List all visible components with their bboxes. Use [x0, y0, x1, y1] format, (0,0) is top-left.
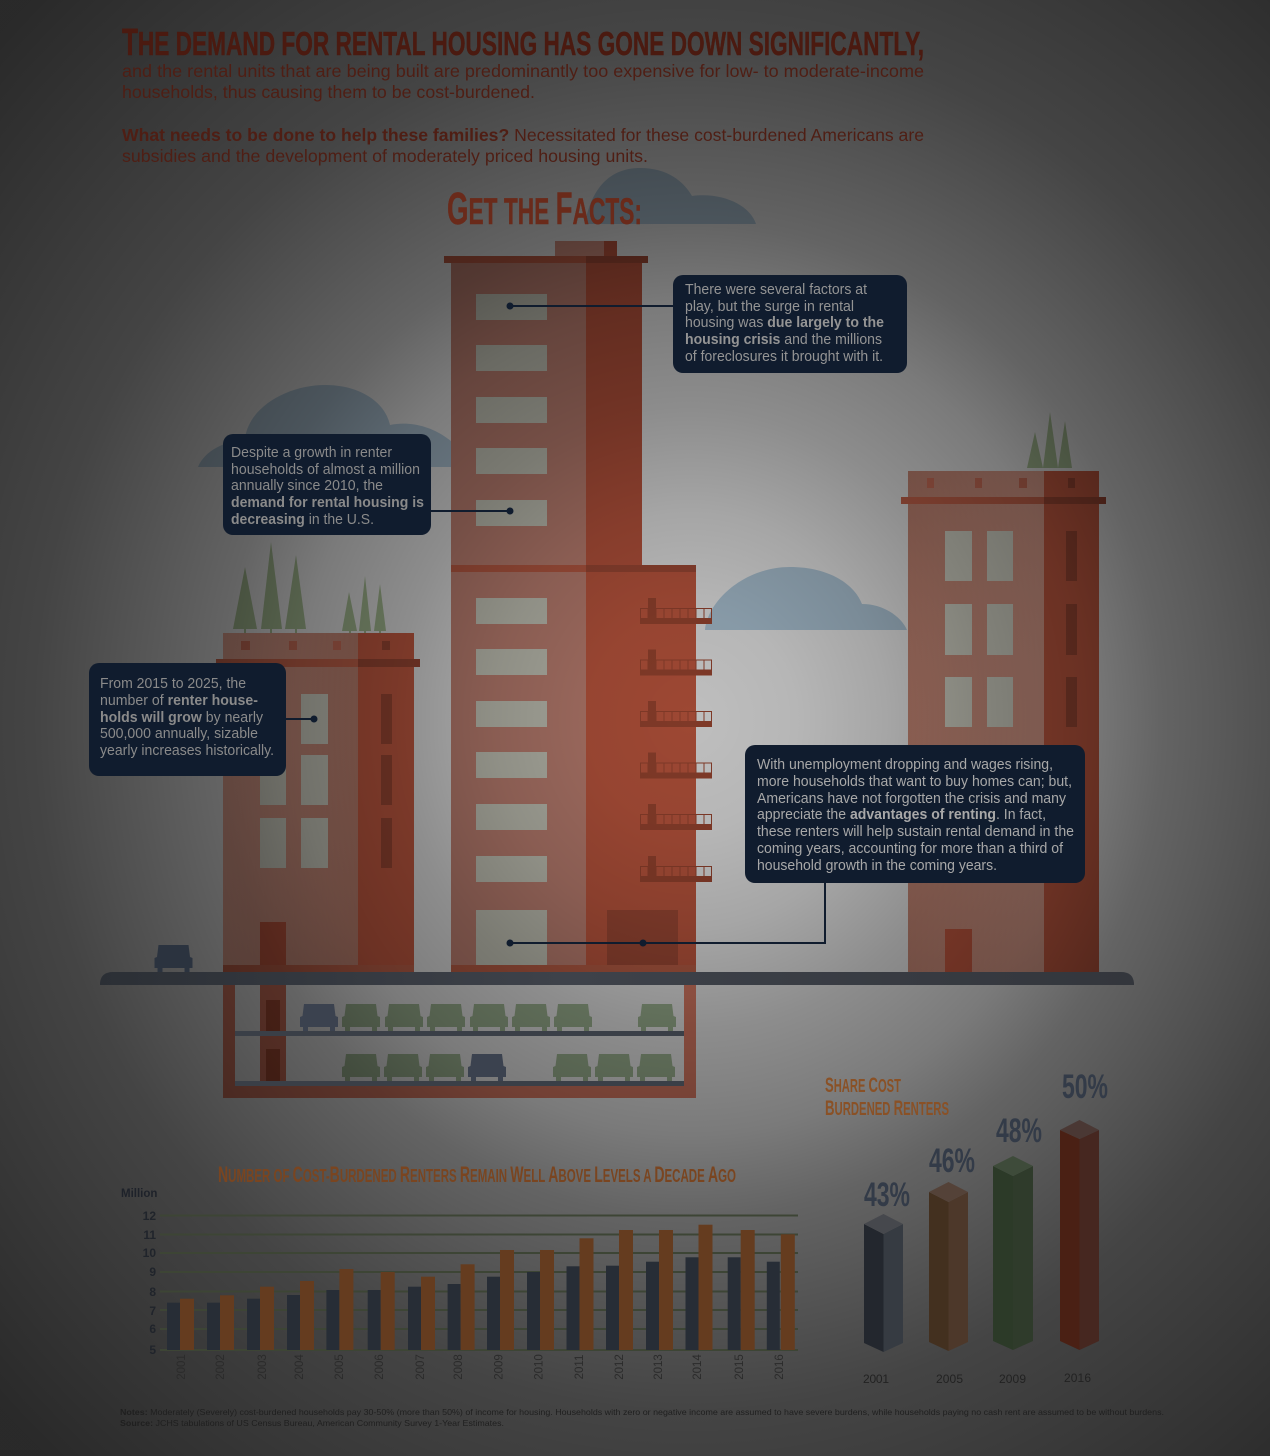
x axis labels: 2013 [653, 1354, 665, 1380]
percent labels [864, 1068, 1108, 1214]
x axis labels: 2016 [774, 1354, 786, 1380]
y axis labels: 8 [149, 1285, 156, 1299]
year labels: 2016 [1064, 1371, 1091, 1385]
y axis labels: 11 [143, 1228, 156, 1242]
x axis labels: 2010 [534, 1354, 546, 1380]
3d bar 2001 [864, 1214, 903, 1352]
callout: housing crisis: housing was due largely to the [685, 315, 884, 331]
callout: renter households grow: number of renter house- [100, 693, 258, 709]
y axis labels: 5 [149, 1343, 156, 1357]
intro text: What needs to be done to help these families? Necessitated for these cost-burdened Americans are [122, 125, 924, 145]
notes and source: Notes: Moderately (Severely) cost-burdened households pay 30-50% (more than 50%) of income for housing. Households with zero or negative income are assumed to have severe burdens, while households paying no cash rent are assumed to be without burdens. [120, 1407, 1164, 1417]
callout: advantages of renting: these renters will help sustain rental demand in the [757, 824, 1074, 840]
notes and source [120, 1407, 1164, 1428]
building: center tower [444, 241, 712, 972]
year labels: 2001 [863, 1372, 889, 1386]
building: right [901, 471, 1106, 972]
x axis labels: 2011 [574, 1355, 586, 1379]
callout: advantages of renting: coming years, accounting for more than a third of [757, 841, 1063, 857]
percent labels: 48% [996, 1112, 1042, 1150]
x axis labels: 2002 [215, 1354, 227, 1380]
x axis labels: 2004 [294, 1354, 306, 1380]
callout: advantages of renting: With unemployment dropping and wages rising, [757, 757, 1053, 773]
trees: right building roof [1027, 412, 1072, 468]
3d bar 2009 [993, 1156, 1033, 1350]
x axis labels: 2009 [494, 1354, 506, 1380]
callout: demand decreasing: Despite a growth in renter [231, 445, 392, 461]
y axis labels [143, 1209, 156, 1357]
cloud: top [585, 168, 756, 224]
x axis labels: 2015 [734, 1354, 746, 1380]
intro text: and the rental units that are being built are predominantly too expensive for low- to moderate-income [122, 61, 924, 81]
year labels: 2005 [936, 1372, 963, 1386]
percent labels: 50% [1062, 1068, 1108, 1106]
y axis labels: 10 [143, 1246, 156, 1260]
y axis labels: 9 [149, 1265, 156, 1279]
axis unit: Million [121, 1188, 157, 1200]
callout: housing crisis: of foreclosures it brought with it. [685, 349, 883, 365]
road and parking floors [100, 972, 1134, 1086]
x axis labels: 2001 [176, 1354, 188, 1380]
cloud: left [198, 385, 470, 467]
callout: renter households grow [89, 663, 318, 776]
y axis labels: 12 [143, 1209, 156, 1223]
callout: housing crisis: play, but the surge in rental [685, 299, 854, 315]
percent labels: 46% [929, 1142, 975, 1180]
callout: advantages of renting: household growth in the coming years. [757, 858, 997, 874]
navy bars [167, 1257, 780, 1350]
heading: THE DEMAND FOR RENTAL HOUSING HAS GONE DOWN SIGNIFICANTLY, [122, 22, 924, 64]
callout: demand decreasing: decreasing in the U.S. [231, 512, 374, 528]
3d bar 2005 [929, 1182, 968, 1351]
chart title: NUMBER OF COST-BURDENED RENTERS REMAIN WELL ABOVE LEVELS A DECADE AGO [218, 1162, 736, 1187]
notes and source: Source: JCHS tabulations of US Census Bureau, American Community Survey 1-Year Estimates. [120, 1418, 504, 1428]
x axis labels [176, 1354, 786, 1380]
callout: renter households grow: yearly increases historically. [100, 743, 274, 759]
3d bar 2016 [1060, 1120, 1099, 1350]
callout: housing crisis: housing crisis and the millions [685, 332, 882, 348]
year labels: 2009 [999, 1372, 1026, 1386]
year labels [863, 1371, 1091, 1386]
callout: demand decreasing: annually since 2010, the [231, 478, 383, 494]
chart: cost-burdened renters [121, 1162, 798, 1380]
callout: advantages of renting: more households that want to buy homes can; but, [757, 774, 1072, 790]
chart heading: SHARE COST [825, 1074, 901, 1097]
callout: advantages of renting [506, 745, 1085, 946]
street car [154, 945, 192, 972]
x axis labels: 2007 [415, 1354, 427, 1380]
y axis labels: 7 [149, 1304, 156, 1318]
chart heading [825, 1074, 949, 1120]
building: left [216, 633, 420, 972]
callout: demand decreasing: households of almost a million [231, 462, 420, 478]
chart heading: BURDENED RENTERS [825, 1097, 949, 1120]
parked green cars [342, 1004, 676, 1081]
trees: left building roof [233, 542, 386, 633]
callout: housing crisis: There were several factors at [685, 282, 867, 298]
x axis labels: 2005 [334, 1354, 346, 1380]
x axis labels: 2014 [692, 1354, 704, 1380]
section heading: get the facts: GET THE FACTS: [447, 183, 642, 234]
callout: demand decreasing [223, 434, 514, 535]
callout: renter households grow: From 2015 to 2025, the [100, 676, 246, 692]
chart: share cost burdened renters [825, 1068, 1108, 1386]
cloud: right [705, 567, 907, 630]
callout: advantages of renting: appreciate the advantages of renting. In fact, [757, 807, 1046, 823]
intro text: subsidies and the development of moderately priced housing units. [122, 146, 648, 166]
intro text [122, 61, 924, 166]
parked dark cars [300, 1004, 506, 1081]
callout: housing crisis [506, 275, 907, 373]
percent labels: 43% [864, 1176, 910, 1214]
underground parking structure [223, 985, 696, 1098]
x axis labels: 2008 [453, 1354, 465, 1380]
x axis labels: 2006 [374, 1354, 386, 1380]
intro text: households, thus causing them to be cost-burdened. [122, 82, 535, 102]
callout: renter households grow: 500,000 annually, sizable [100, 726, 258, 742]
x axis labels: 2003 [257, 1354, 269, 1380]
callout: renter households grow: holds will grow by nearly [100, 710, 264, 726]
callout: demand decreasing: demand for rental housing is [231, 495, 424, 511]
orange bars [180, 1225, 795, 1350]
callout: advantages of renting: Americans have not forgotten the crisis and many [757, 791, 1067, 807]
y axis labels: 6 [149, 1322, 156, 1336]
x axis labels: 2012 [614, 1354, 626, 1380]
